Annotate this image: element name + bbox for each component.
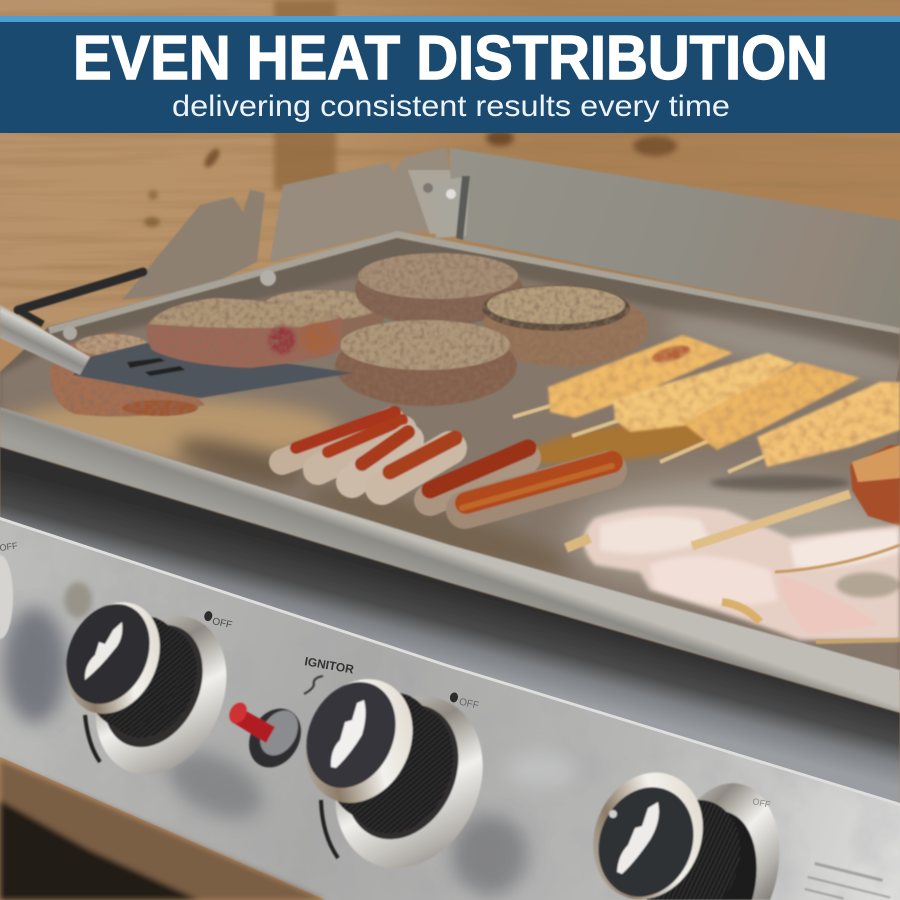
title: EVEN HEAT DISTRIBUTION [73,24,828,93]
griddle cooking tray and surface [0,233,900,680]
spatula [0,305,353,398]
dark recess below griddle [0,447,900,805]
igniter button [226,676,323,777]
title banner [0,16,900,133]
banner background [0,22,900,133]
lower left burger patty [50,332,205,417]
griddle front lip [0,407,900,713]
label: knob 1 off: OFF [211,616,233,631]
back burger patties [264,253,648,406]
halloumi skewers [513,335,900,526]
knob 1 [49,587,251,796]
knob 3 [575,756,779,900]
subtitle: delivering consistent results every time [172,90,730,123]
label: knob 2 off: OFF [458,697,480,712]
sausages [282,412,612,510]
bacon with skewer [566,494,900,642]
label: knob 1 off [202,610,234,631]
label: knob 2 off [448,692,480,712]
panel instruction lines [805,862,890,900]
burger patty on spatula [147,298,342,368]
igniter label: IGNITOR [303,654,355,677]
stainless back splash panels [18,147,900,340]
banner accent stripe [0,16,900,22]
wooden wall background [0,0,900,330]
control panel [0,517,900,900]
knob 2 [286,661,510,892]
floor below grill [0,760,325,900]
label: knob 3 off: OFF [752,796,772,810]
